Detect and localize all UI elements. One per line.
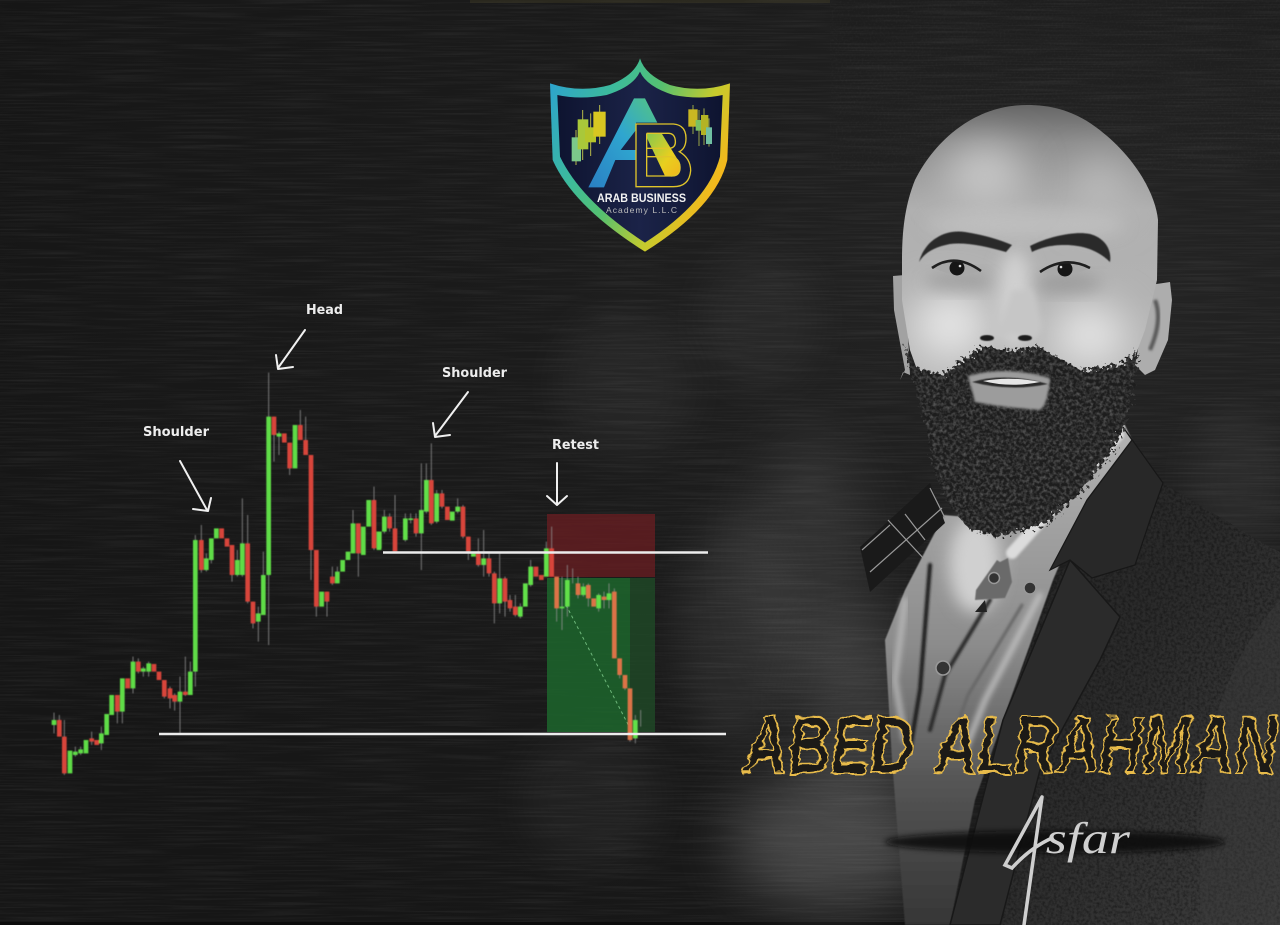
jacket sleeve seam (1200, 600, 1280, 925)
letter A right leg (647, 133, 681, 177)
signature brush stroke (885, 831, 1225, 853)
plaid collar (860, 483, 945, 592)
trade zones: stop and target (547, 514, 655, 732)
jacket (950, 427, 1280, 925)
annotation labels: Shoulder (143, 425, 210, 440)
logo subtitle: Academy L.L.C (606, 205, 677, 215)
face shading (912, 145, 1128, 365)
eyebrows (919, 232, 1110, 262)
name title: ABED (743, 700, 914, 791)
candles: rally and left shoulder and head (54, 373, 379, 775)
signature (1005, 797, 1131, 925)
shield body (557, 72, 723, 243)
annotation labels: Shoulder (442, 366, 508, 381)
left ear (893, 275, 910, 380)
letter B outline (636, 124, 691, 187)
nose (980, 290, 1042, 341)
neck highlight (949, 517, 1001, 613)
eyes (932, 260, 1090, 276)
shirt placket and folds (895, 435, 1118, 750)
jacket lapels (950, 560, 1120, 925)
candles right (688, 105, 712, 147)
bald head (902, 105, 1158, 480)
logo: Arab Business Academy shield (550, 58, 730, 252)
annotation arrows (180, 330, 567, 511)
logo wordmark: ARAB BUSINESS (597, 193, 686, 205)
shirt and neck (885, 415, 1132, 925)
annotation labels (143, 303, 599, 453)
shield rim (550, 58, 730, 252)
mouth and lips (968, 371, 1050, 410)
name title (743, 700, 1278, 791)
annotation labels: Retest (552, 438, 599, 453)
portrait of the presenter (743, 105, 1280, 925)
shirt collar buttons (936, 558, 1036, 675)
smoke clouds (520, 250, 1280, 910)
candles left (572, 105, 606, 165)
signature: Asfar (1044, 814, 1131, 863)
candlestick chart (54, 373, 641, 775)
right ear (1135, 282, 1172, 375)
beard (905, 345, 1138, 537)
letter A (588, 98, 657, 187)
candles: right shoulder and retest drop (379, 443, 641, 743)
annotation labels: Head (306, 303, 343, 318)
support and neckline lines (159, 552, 726, 734)
